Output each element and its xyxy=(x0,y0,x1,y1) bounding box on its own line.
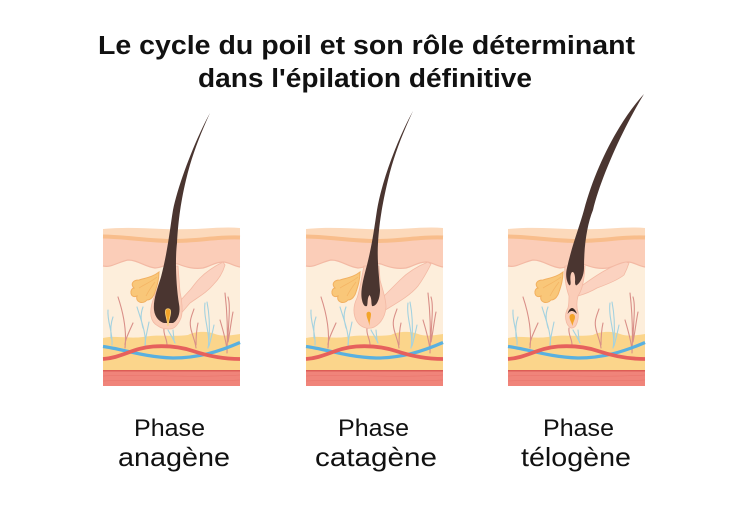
hair papilla xyxy=(366,312,371,326)
panel: phase anagène xyxy=(103,113,240,386)
title: Le cycle du poil et son rôle déterminant xyxy=(98,32,636,60)
skin cross-section xyxy=(103,228,240,386)
sebaceous gland xyxy=(131,272,159,303)
hair xyxy=(361,111,413,306)
skin cross-section xyxy=(306,228,443,386)
skin cross-section xyxy=(508,228,645,386)
follicle sheath xyxy=(565,266,585,328)
arrector muscle xyxy=(382,262,431,312)
arrector muscle xyxy=(578,262,629,296)
sebaceous gland xyxy=(332,272,360,303)
title xyxy=(98,32,636,93)
arrector muscle xyxy=(178,262,225,317)
label: phase télogène xyxy=(521,415,631,472)
label: phase télogène: Phase xyxy=(543,415,614,442)
panel: phase télogène xyxy=(508,94,645,386)
panel: phase catagène xyxy=(306,111,443,386)
label: phase télogène: télogène xyxy=(521,442,631,472)
label: phase catagène: catagène xyxy=(315,442,437,472)
hair xyxy=(566,94,644,285)
follicle sheath xyxy=(151,266,182,329)
label: phase anagène xyxy=(118,415,230,472)
sebaceous gland xyxy=(535,272,563,303)
telogen club xyxy=(568,308,577,314)
hair papilla xyxy=(165,309,171,326)
title: dans l'épilation définitive xyxy=(198,65,532,93)
label: phase anagène: Phase xyxy=(134,415,205,442)
label: phase anagène: anagène xyxy=(118,442,230,472)
hair papilla xyxy=(570,314,575,326)
follicle sheath xyxy=(354,266,386,328)
label: phase catagène: Phase xyxy=(338,415,409,442)
hair xyxy=(154,113,210,323)
label: phase catagène xyxy=(315,415,437,472)
